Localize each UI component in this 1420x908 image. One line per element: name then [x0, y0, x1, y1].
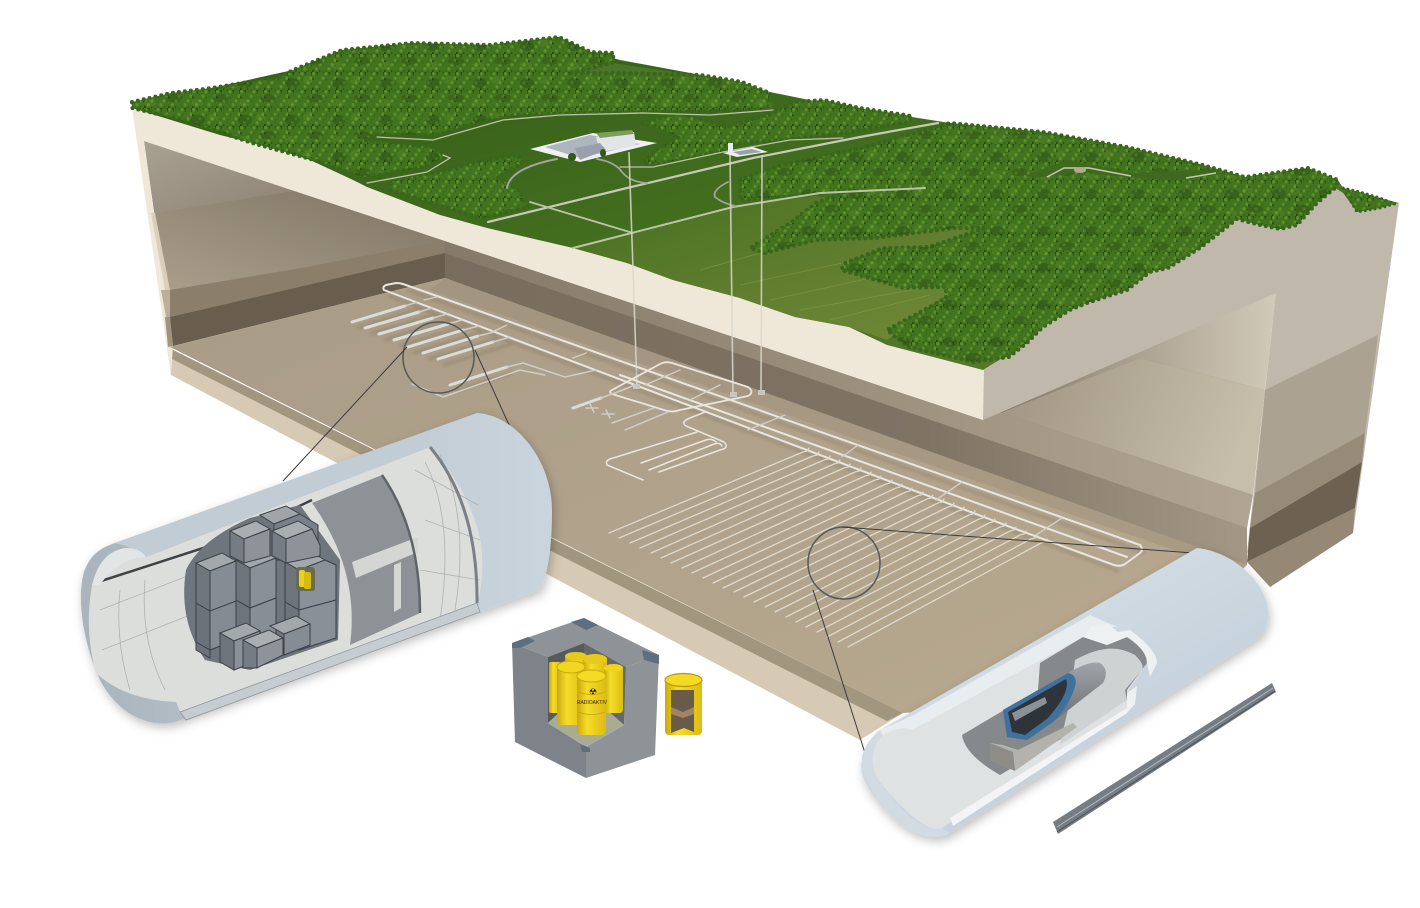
right tunnel: high-level waste canister drift — [861, 548, 1268, 837]
concrete base block — [990, 723, 1077, 771]
dark slit under lip — [98, 500, 312, 582]
grass base — [132, 37, 1399, 370]
front end ring opening — [92, 548, 146, 585]
main surface facility — [530, 130, 657, 162]
main disposal drift array — [609, 448, 1047, 647]
roads — [367, 110, 938, 248]
clearing with pad — [1026, 160, 1245, 180]
yellow drums inside container — [296, 567, 315, 591]
grey bulkhead — [312, 475, 420, 645]
callout: left detail circle and leader lines — [283, 322, 510, 481]
tunnel concrete body — [81, 413, 552, 723]
cube top — [512, 618, 659, 667]
front ring — [862, 730, 950, 837]
canister tube — [1003, 662, 1106, 740]
left cut edge strata — [132, 108, 173, 375]
outer rim of cut — [430, 447, 477, 603]
drums in cube — [549, 652, 623, 735]
tube shadows on the floor — [357, 290, 1145, 571]
forest: upper centre band — [643, 100, 912, 165]
underground gallery network — [352, 283, 1142, 647]
upper lip — [880, 615, 1118, 735]
terrain surface — [132, 37, 1399, 370]
dark chamber backdrop — [962, 637, 1147, 775]
drum with radiation mark and label: RADIOAKTIV — [577, 700, 608, 706]
left wall of the cavity — [144, 141, 445, 346]
left field thin tube ends — [405, 302, 668, 430]
drum contents cut — [671, 690, 694, 733]
canister cut interior — [1008, 679, 1067, 735]
bulkhead rim — [382, 475, 420, 613]
interior lining — [870, 637, 1147, 830]
canister inner cask — [1012, 697, 1047, 721]
forest: centre grove — [391, 155, 528, 218]
middle test field — [606, 412, 726, 480]
drum with radiation mark and label: ☢ — [589, 688, 597, 698]
forest: right mottling — [740, 123, 1338, 362]
floor of the cavity — [170, 278, 1247, 713]
corner brackets — [512, 618, 659, 752]
secondary surface facility — [723, 143, 768, 157]
bulkhead light bands — [352, 537, 418, 612]
light meadow — [573, 196, 990, 340]
lower front strata of the block — [167, 347, 903, 740]
waste package cube with drums — [512, 618, 659, 778]
lower lip — [950, 708, 1127, 826]
vertical shafts — [629, 152, 762, 395]
meadow stripes — [700, 225, 940, 320]
callout: right detail circle and leader lines — [808, 527, 1193, 753]
cross-links — [424, 297, 1062, 535]
forest: left mottling — [132, 37, 770, 177]
cube interior — [548, 643, 626, 747]
forest: large right area — [740, 123, 1338, 362]
right face of the block — [983, 188, 1399, 587]
tunnel interior lining — [89, 447, 482, 712]
blue shell — [1003, 673, 1076, 740]
waste container backing — [184, 505, 340, 670]
end profile ribs — [1083, 624, 1157, 677]
shaft feet — [633, 384, 765, 397]
cream slab front — [132, 108, 984, 420]
tile joints — [100, 455, 480, 690]
tunnel concrete body — [861, 548, 1268, 837]
forest: far right corner — [1343, 188, 1395, 212]
shaft loop — [610, 362, 752, 412]
bentonite backfill — [1060, 649, 1143, 745]
forest: large left area — [132, 37, 770, 177]
left tunnel: intermediate-level waste cavern — [81, 413, 552, 723]
long spent-fuel rod bar — [1053, 683, 1276, 834]
drum with radiation mark and label — [577, 670, 608, 735]
stacked concrete containers — [196, 506, 336, 670]
cube left face — [512, 643, 586, 778]
upper lip of the cut — [115, 430, 430, 557]
cube right face — [586, 655, 659, 778]
left field thick tubes — [352, 306, 601, 408]
back wall of the cavity — [445, 240, 1276, 565]
block: cross-section of the site — [132, 108, 1399, 740]
main rails — [383, 283, 1142, 566]
wall-to-floor shadow — [430, 278, 1200, 556]
far meadow — [571, 63, 772, 112]
single cut-away drum — [665, 674, 702, 735]
lower lip of the cut — [180, 603, 480, 720]
